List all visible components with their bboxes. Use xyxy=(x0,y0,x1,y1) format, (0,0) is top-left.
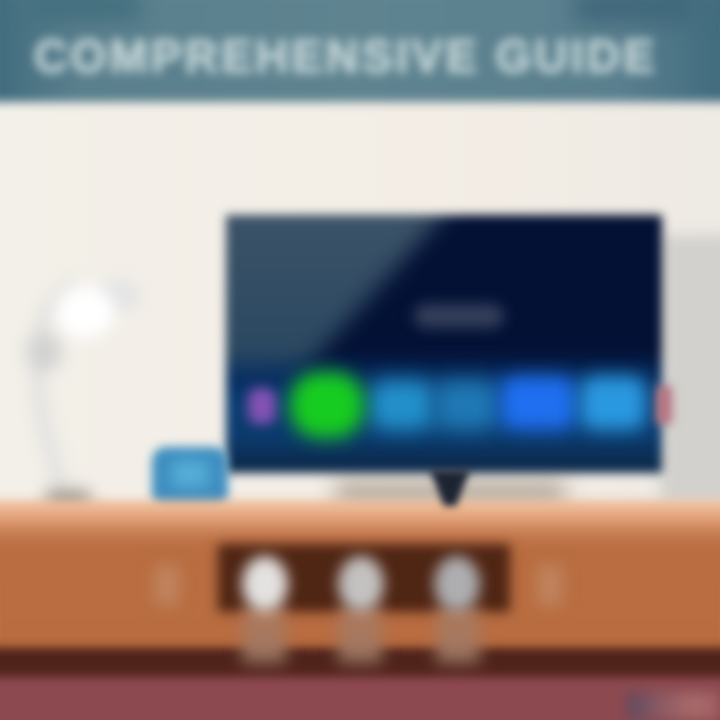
console side mark right xyxy=(538,565,562,605)
knob 1 xyxy=(242,556,288,612)
streak 3 xyxy=(436,608,480,664)
speaker screen xyxy=(172,461,208,487)
lamp base xyxy=(46,490,90,514)
knob streaks xyxy=(233,602,489,672)
console base shadow xyxy=(0,648,720,674)
wall shadow right of TV xyxy=(660,235,720,505)
streak 1 xyxy=(242,608,286,664)
tv stand xyxy=(426,466,474,512)
banner dark corner left xyxy=(30,0,140,22)
title text: COMPREHENSIVE GUIDE xyxy=(34,30,657,82)
streak 2 xyxy=(338,608,382,664)
app: sky blue xyxy=(580,376,646,430)
lamp shadow xyxy=(26,332,62,372)
app: red edge xyxy=(656,386,672,424)
floor lamp xyxy=(22,280,138,506)
app: purple xyxy=(248,388,276,424)
app: light blue xyxy=(370,380,434,430)
knob 2 xyxy=(338,556,384,612)
lower screen band xyxy=(216,350,672,485)
console side mark left xyxy=(155,565,179,605)
watermark logo xyxy=(628,692,720,720)
app row xyxy=(240,358,656,452)
app: teal blue xyxy=(434,380,498,430)
carpet xyxy=(0,676,720,720)
app: green xyxy=(290,372,364,438)
wall background xyxy=(0,100,720,520)
lamp shade xyxy=(96,280,140,312)
on-screen label xyxy=(414,304,504,328)
lower underlay xyxy=(0,640,720,720)
knob 3 xyxy=(434,556,480,612)
screen reflection xyxy=(220,210,452,376)
console recess with buttons xyxy=(218,544,510,612)
app: bright blue xyxy=(500,376,576,430)
shadow under TV xyxy=(335,478,565,514)
small smart speaker device xyxy=(152,447,228,509)
banner dark corner right xyxy=(575,0,695,24)
media console xyxy=(0,500,720,655)
console knobs xyxy=(231,546,490,621)
television xyxy=(226,215,662,473)
title banner xyxy=(0,0,720,102)
